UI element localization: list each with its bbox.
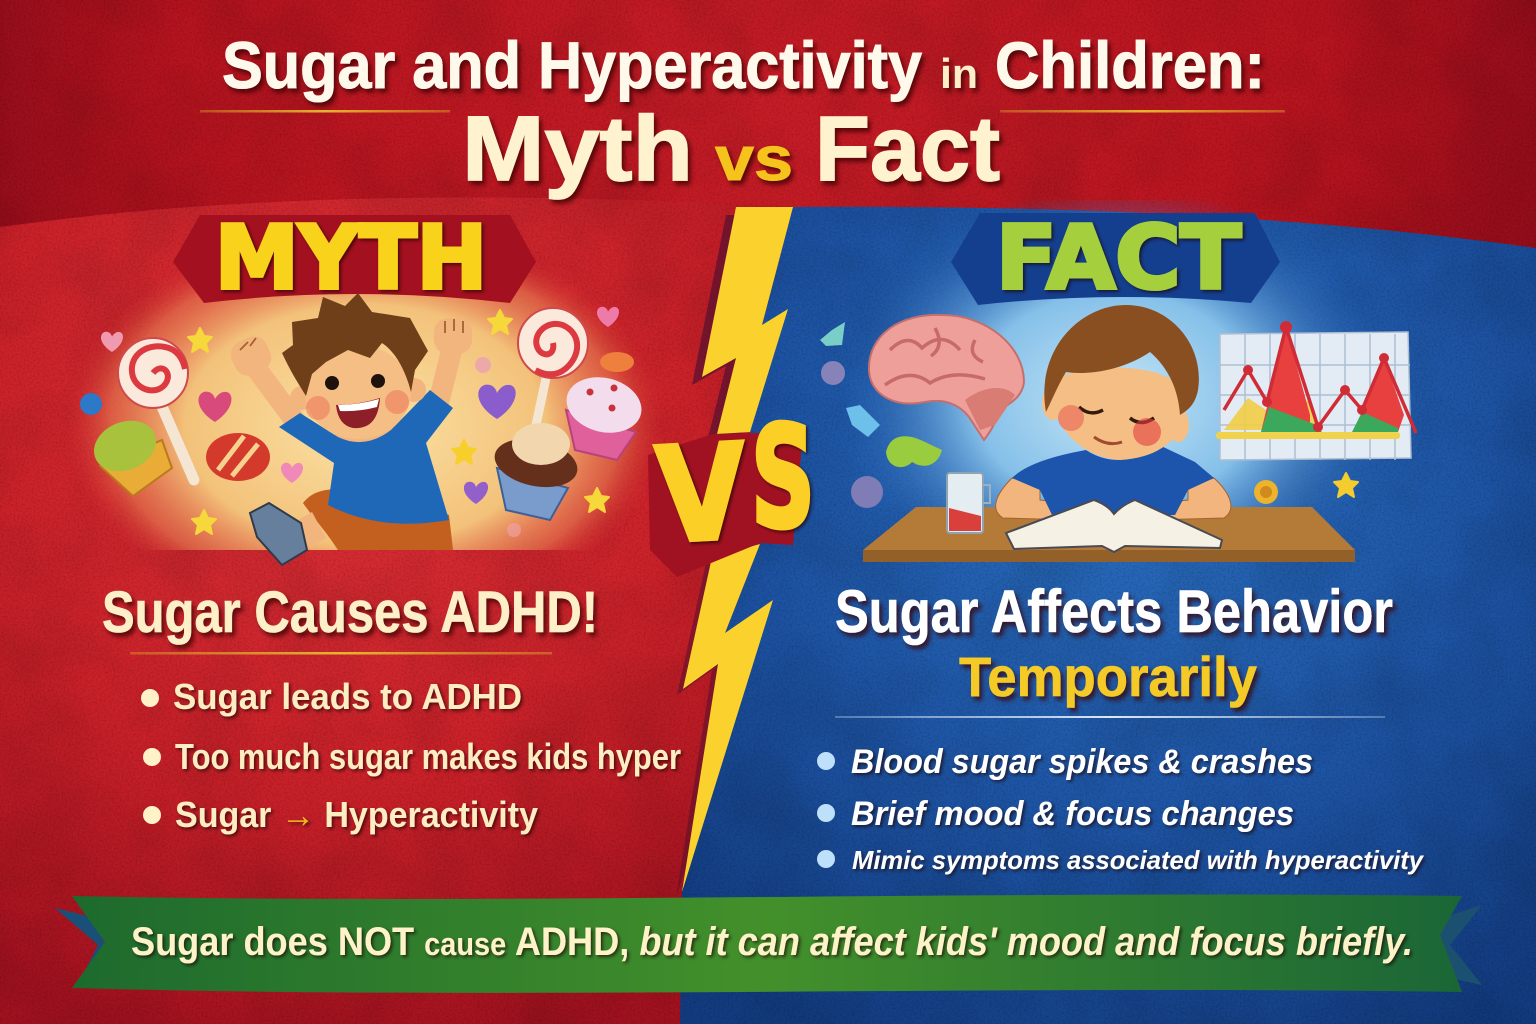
confetti shapes [820, 322, 1358, 508]
title: Fact [815, 98, 1000, 200]
panel: myth background [0, 197, 793, 1024]
icon: striped candy [206, 433, 270, 481]
bottom takeaway banner [55, 895, 1482, 993]
icon: boy jumping [226, 293, 472, 565]
myth bullet list [141, 676, 681, 835]
VS badge [648, 397, 815, 577]
arms and fists [226, 318, 472, 422]
title: vs [715, 125, 793, 194]
icon: line chart board [1216, 321, 1416, 460]
neck [335, 425, 395, 446]
pants [303, 489, 453, 550]
title: Sugar and Hyperactivity [222, 28, 922, 102]
fact heading text [835, 578, 1393, 718]
VS badge: S [751, 397, 815, 560]
shin [298, 512, 326, 548]
illustration: myth scene [80, 293, 647, 565]
background: top red band [0, 0, 1536, 270]
icon: brain [869, 315, 1024, 440]
candy confetti [80, 307, 634, 537]
fact heading text: Temporarily [959, 645, 1257, 708]
panel: fact background [680, 207, 1536, 1024]
icon: lollipop right [518, 308, 588, 425]
fact bullet list [817, 743, 1425, 875]
title: in [940, 50, 978, 97]
myth heading banner: MYTH [215, 207, 487, 309]
fact heading text: Sugar Affects Behavior [835, 578, 1393, 645]
divider: lightning bolt [676, 207, 793, 898]
shoe [250, 503, 307, 565]
title [200, 28, 1285, 200]
icon: desk [863, 507, 1355, 562]
title: Children: [995, 28, 1265, 102]
icon: green cupcake [86, 412, 172, 496]
bullet 3: Sugar → Hyperactivity [175, 794, 538, 835]
myth heading text: Sugar Causes ADHD! [102, 580, 598, 645]
illustration: fact scene [820, 305, 1416, 562]
myth scene glow [78, 270, 653, 550]
bullet 1: Blood sugar spikes & crashes [851, 743, 1313, 781]
ribbon tail left [55, 908, 104, 985]
bullet 1: Sugar leads to ADHD [173, 676, 522, 717]
bullet 3: Mimic symptoms associated with hyperactivity [852, 845, 1425, 875]
VS badge: V [653, 416, 749, 572]
icon: lollipop left [118, 338, 194, 480]
head [1042, 305, 1199, 460]
shirt [279, 390, 453, 524]
bullet 2: Brief mood & focus changes [851, 795, 1294, 833]
title: Myth [462, 98, 693, 200]
bullet 2: Too much sugar makes kids hyper [175, 736, 681, 777]
icon: glass [947, 473, 990, 533]
fact scene glow [864, 200, 1350, 511]
arms [996, 478, 1231, 520]
ribbon tail right [1436, 905, 1482, 985]
icon: pink cupcake [561, 370, 647, 460]
head [282, 293, 428, 439]
icon: open book [1006, 500, 1222, 552]
bottom takeaway banner: Sugar does NOT cause ADHD, but it can affect kids' mood and focus briefly. [131, 920, 1413, 964]
fact heading banner: FACT [996, 207, 1241, 309]
shirt [1012, 445, 1214, 515]
icon: chocolate cupcake [490, 423, 582, 520]
icon: boy reading [996, 305, 1231, 520]
